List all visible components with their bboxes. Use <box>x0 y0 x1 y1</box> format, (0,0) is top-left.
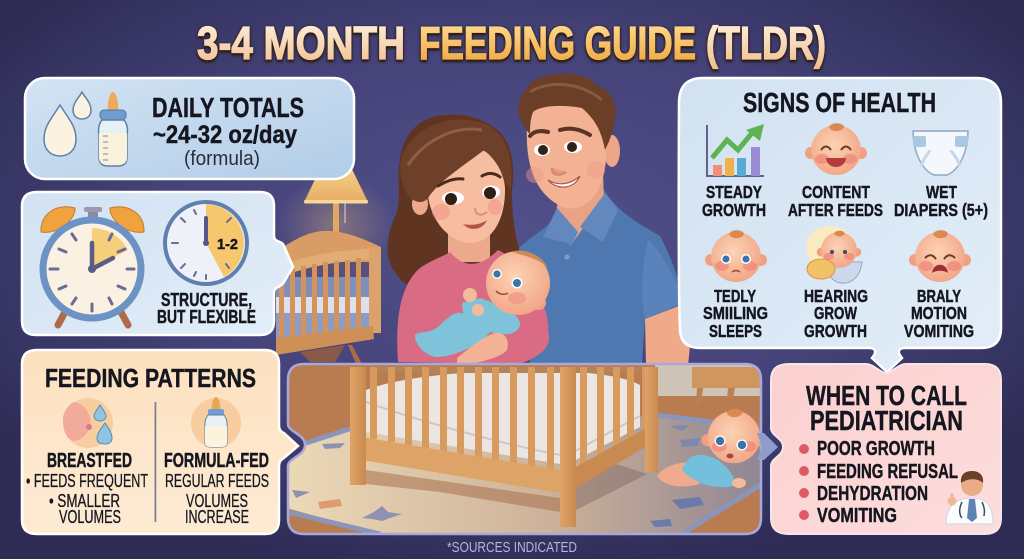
icon: happy baby <box>805 123 867 175</box>
illustration: nursery crib in background <box>276 231 381 364</box>
formula note: (formula) <box>184 148 260 170</box>
sign labels, row one: WET <box>926 182 957 202</box>
panel: when to call pediatrician <box>771 364 1001 534</box>
icon: diaper <box>913 131 968 175</box>
sign labels, row one: DIAPERS (5+) <box>894 200 988 220</box>
heading: signs of health: SIGNS OF HEALTH <box>743 87 936 118</box>
footnote: *SOURCES INDICATED <box>447 539 577 556</box>
icon: calm baby <box>705 230 767 282</box>
heading: daily totals: DAILY TOTALS <box>152 92 304 123</box>
sign labels, row two: SMIILING <box>703 303 768 323</box>
panel: feeding schedule <box>22 192 293 335</box>
breastfed column text: • SMALLER <box>49 491 120 511</box>
sign labels, row two: MOTION <box>911 303 967 323</box>
sign labels, row two: GROW <box>814 303 857 323</box>
sign labels, row two: BRALY <box>917 286 961 306</box>
icon: feed interval clock <box>165 202 247 284</box>
interval label: 1-2 <box>217 236 238 253</box>
warning list: VOMITING <box>817 505 897 527</box>
icon: crying baby <box>909 230 971 282</box>
breastfed column text: VOLUMES <box>59 507 121 527</box>
formula-fed column text <box>164 450 269 527</box>
illustration panel: crib and crawling baby <box>286 362 767 534</box>
warning list: DEHYDRATION <box>817 483 928 505</box>
formula-fed column text: VOLUMES <box>186 491 248 511</box>
illustration: mother <box>388 114 548 364</box>
warning list: POOR GROWTH <box>817 438 935 460</box>
heading: when to call pediatrician <box>806 380 967 436</box>
sign labels, row two: HEARING <box>804 286 868 306</box>
formula-fed column text: INCREASE <box>185 507 249 527</box>
breastfed column text: • FEEDS FREQUENT <box>26 471 148 491</box>
warning list <box>799 438 958 527</box>
icon: alarm clock <box>41 207 144 325</box>
heading: feeding patterns: FEEDING PATTERNS <box>45 363 256 393</box>
breastfed column text <box>26 450 148 527</box>
daily amount: ~24-32 oz/day <box>153 121 297 149</box>
sign labels, row two: SLEEPS <box>709 321 762 341</box>
sign labels, row one: AFTER FEEDS <box>788 200 883 220</box>
arrow: scene to pediatrician <box>757 433 778 460</box>
sign labels, row one: CONTENT <box>802 182 870 202</box>
icon: breast <box>63 398 113 448</box>
sign labels, row two <box>703 286 974 341</box>
sign labels, row two: VOMITING <box>904 321 974 341</box>
caption: structure but flexible: STRUCTURE, <box>161 290 252 310</box>
sign labels, row one: GROWTH <box>702 200 766 220</box>
caption: structure but flexible <box>157 290 256 327</box>
icon: baby with bowl <box>806 226 862 283</box>
heading: when to call pediatrician: PEDIATRICIAN <box>810 405 963 436</box>
caption: structure but flexible: BUT FLEXIBLE <box>157 307 256 327</box>
title <box>197 17 826 69</box>
icon: milk drops and bottle <box>44 92 128 166</box>
illustration: baby held in arms <box>415 251 550 365</box>
sign labels, row two: TEDLY <box>714 286 756 306</box>
icon: formula bottle <box>191 397 241 448</box>
illustration: bedside lamp <box>278 165 394 275</box>
sign labels, row one: STEADY <box>706 182 762 202</box>
breastfed column text: BREASTFED <box>47 450 132 472</box>
icon: growth chart <box>707 124 764 176</box>
title: FEEDING GUIDE <box>419 17 696 69</box>
formula-fed column text: FORMULA-FED <box>164 450 269 472</box>
sign labels, row one <box>702 182 988 220</box>
panel: feeding patterns <box>22 350 298 534</box>
illustration: father <box>515 74 690 364</box>
icon: doctor <box>946 471 993 524</box>
heading: when to call pediatrician: WHEN TO CALL <box>806 380 967 411</box>
title: (TLDR) <box>706 17 826 69</box>
title: 3-4 MONTH <box>197 17 405 69</box>
panel: signs of health <box>679 78 1001 372</box>
panel: daily totals <box>25 78 354 179</box>
sign labels, row two: GROWTH <box>804 321 867 341</box>
warning list: FEEDING REFUSAL <box>817 461 958 483</box>
formula-fed column text: REGULAR FEEDS <box>165 471 269 491</box>
